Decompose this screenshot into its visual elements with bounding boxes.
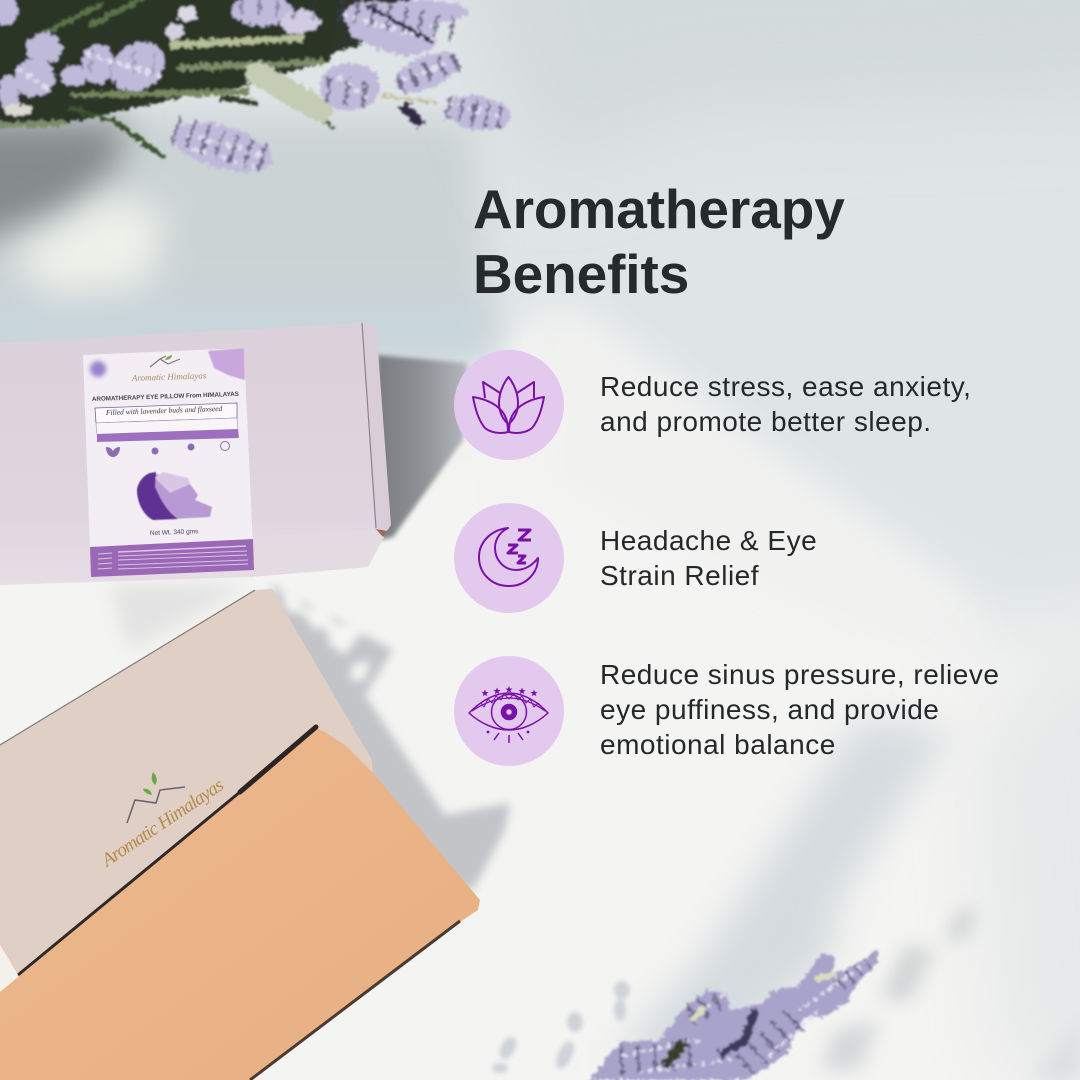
product box — [0, 323, 391, 585]
text: headache benefit — [600, 525, 817, 591]
text: headache benefit: Headache & Eye — [600, 525, 817, 556]
floret highlights — [20, 15, 505, 168]
embroidered logo: Aromatic Himalayas — [96, 775, 228, 872]
lavender sprig bottom — [590, 950, 877, 1080]
beige eye pillow — [0, 589, 373, 975]
box label: Filled with lavender buds and flaxseed — [105, 404, 223, 417]
box cast shadow — [377, 355, 467, 540]
florets — [0, 0, 513, 181]
box label: AROMATHERAPY EYE PILLOW From HIMALAYAS — [92, 391, 239, 403]
dappled leaf shadow — [110, 585, 510, 890]
peach eye pillow — [0, 727, 480, 1080]
stems and leaves — [0, 0, 345, 130]
title: Benefits — [473, 243, 689, 305]
icon: crescent moon with z letters — [454, 503, 564, 613]
icon: lotus — [454, 350, 564, 460]
title — [473, 178, 845, 305]
text: sinus benefit — [600, 659, 999, 760]
text: stress benefit — [600, 371, 971, 437]
box label — [83, 348, 254, 577]
box label: Aromatic Himalayas — [131, 370, 207, 383]
text: sinus benefit: eye puffiness, and provide — [600, 694, 939, 725]
text: sinus benefit: Reduce sinus pressure, relieve — [600, 659, 999, 690]
floret shadows — [90, 5, 510, 160]
label icons — [106, 442, 230, 457]
text: headache benefit: Strain Relief — [600, 560, 759, 591]
box label: Net Wt. 340 gms — [150, 528, 199, 537]
faint sprig shadows — [492, 981, 630, 1073]
text: stress benefit: Reduce stress, ease anxiety, — [600, 371, 971, 402]
icon: eye with stars — [454, 656, 564, 766]
title: Aromatherapy — [473, 178, 845, 240]
text: sinus benefit: emotional balance — [600, 729, 836, 760]
label photo: face with eye pillow — [137, 472, 212, 520]
lavender sprigs top left — [0, 0, 513, 181]
text: stress benefit: and promote better sleep. — [600, 406, 932, 437]
